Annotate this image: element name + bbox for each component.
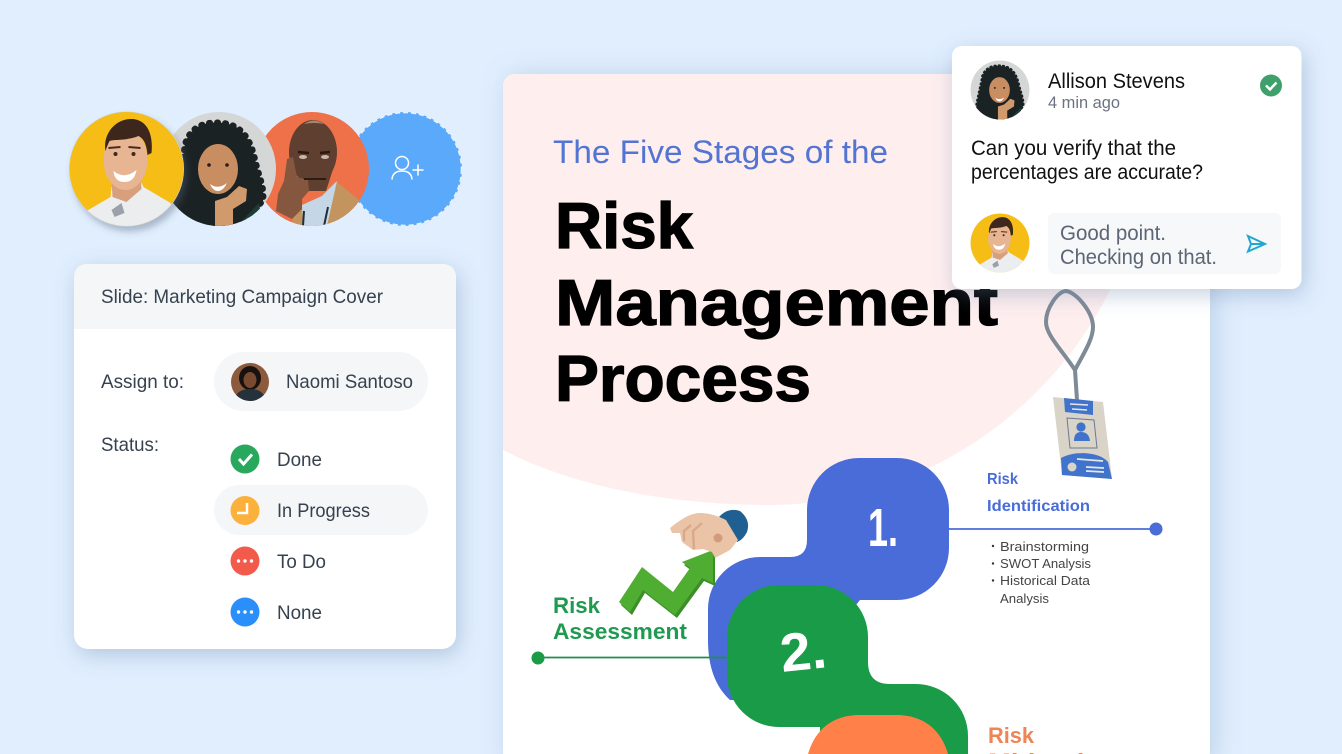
icon: lanyard and id badge [1046,291,1112,479]
reply box: Good point. [1060,222,1166,245]
status: none [230,598,322,626]
panel: assignment card [74,264,456,649]
icon: assignee photo [231,363,269,401]
assignee pill: Naomi Santoso [286,371,413,393]
stage 1 connector [949,522,1162,536]
assign label: Assign to: [101,371,184,393]
stage 1 bullet list [992,539,1092,606]
poster pink header shape [503,74,1110,505]
icon: send arrow [1248,236,1265,252]
comment text: Can you verify that the [971,137,1176,160]
stage 1 heading: Risk [987,471,1018,488]
commenter avatar [971,61,1029,119]
status label: Status: [101,434,159,456]
card header [74,264,456,329]
status: to do [230,546,326,576]
comment text [971,137,1203,184]
stage 1 heading: Identification [987,498,1090,515]
card body [74,264,456,649]
commenter name: Allison Stevens [1048,70,1185,93]
comment time: 4 min ago [1048,94,1120,112]
panel: poster [503,74,1210,754]
avatar: woman with curly hair [162,112,276,226]
poster subtitle: The Five Stages of the [553,134,888,170]
stage 2 number: 2. [777,619,829,684]
status: done [230,444,322,474]
stage 2 heading [553,593,688,644]
icon: hand [670,510,748,558]
icon: resolved check [1260,74,1282,96]
stage 1 blue shape [708,458,949,700]
stage 3 heading [988,723,1118,754]
status: in progress [214,485,428,535]
reply box [1048,213,1281,274]
stage 1 bullet list: SWOT Analysis [1000,556,1092,571]
panel: comment card [952,46,1302,289]
poster title: Process [555,342,811,415]
status: to do: To Do [277,551,326,573]
poster title: Risk [555,189,694,262]
status: in progress: In Progress [277,500,370,522]
stage 1 bullet list: Historical Data [1000,573,1091,588]
stage 1 heading [987,471,1090,515]
stage 2 green shape [727,585,968,754]
stage 2 heading: Assessment [553,619,688,644]
stage 3 orange shape [808,715,948,754]
avatar: add person button [348,112,462,226]
reply avatar [971,214,1029,274]
stage 3 heading: Risk [988,723,1035,748]
assignee pill [214,352,428,411]
comment card body [952,46,1302,289]
avatar: older man [255,112,369,226]
stage 1 bullet list: Brainstorming [1000,539,1089,554]
status: none: None [277,602,322,624]
poster title: Management [555,266,998,339]
status: done: Done [277,449,322,471]
poster sheet [503,74,1210,754]
avatar: man on yellow [69,112,184,229]
card title: Slide: Marketing Campaign Cover [101,286,383,308]
poster title [555,189,998,415]
stage 2 heading: Risk [553,593,601,618]
reply box: Checking on that. [1060,246,1217,269]
icon: green rising arrow [619,550,715,618]
avatar group [69,112,462,229]
stage 1 bullet list: Analysis [1000,591,1049,606]
stage 1 number: 1. [868,498,898,558]
stage 2 connector [532,652,727,664]
comment text: percentages are accurate? [971,161,1203,184]
